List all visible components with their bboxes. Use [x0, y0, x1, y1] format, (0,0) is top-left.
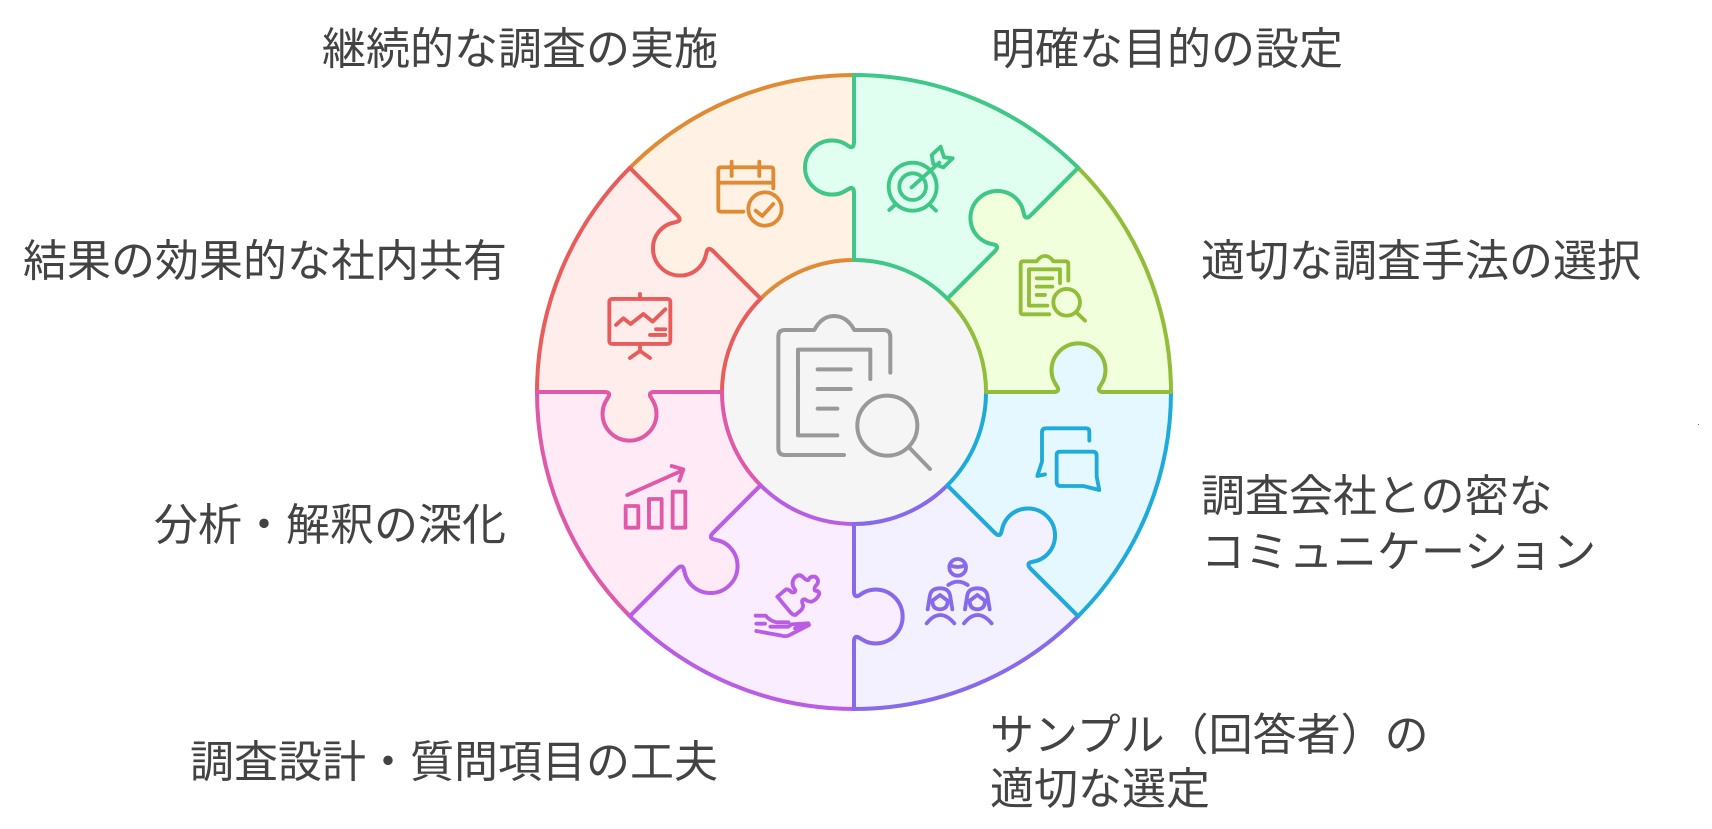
label: sample selection: サンプル（回答者）の: [990, 711, 1429, 760]
panel: analysis (pink): [471, 300, 823, 651]
label: choosing method: 適切な調査手法の選択: [1201, 237, 1641, 286]
panel: sample selection (violet): [762, 423, 1113, 775]
icon: hand with puzzle piece: [756, 575, 819, 636]
icon: presentation board: [609, 294, 670, 358]
panel: continuous surveys (orange): [595, 9, 946, 361]
puzzle ring: [471, 9, 1237, 775]
label: clear objectives: 明確な目的の設定: [991, 25, 1343, 74]
label: continuous surveys: 継続的な調査の実施: [322, 25, 718, 74]
icon: three people: [927, 559, 992, 623]
icon: rising bar chart: [626, 466, 685, 528]
panel: internal sharing (red): [537, 168, 761, 441]
center circle background: [722, 260, 986, 524]
icon: clipboard with magnifier: [1021, 256, 1085, 321]
panel: clear objectives (green): [805, 75, 1078, 299]
center icon: clipboard with magnifier: [778, 316, 930, 469]
panel: research firm communication (blue): [947, 343, 1171, 616]
icon: target with arrow: [889, 147, 953, 211]
panel: choosing method (lime): [885, 133, 1237, 484]
label: analysis: 分析・解釈の深化: [154, 501, 506, 550]
label: sample selection: 適切な選定: [990, 765, 1210, 814]
panel: survey design (purple): [630, 485, 903, 709]
icon: calendar check: [718, 162, 782, 226]
label: internal sharing: 結果の効果的な社内共有: [23, 237, 507, 286]
label: research firm communication: 調査会社との密な: [1201, 472, 1553, 521]
label: research firm communication: コミュニケーション: [1201, 528, 1596, 577]
icon: chat bubbles: [1037, 428, 1099, 490]
label: survey design: 調査設計・質問項目の工夫: [190, 738, 718, 787]
